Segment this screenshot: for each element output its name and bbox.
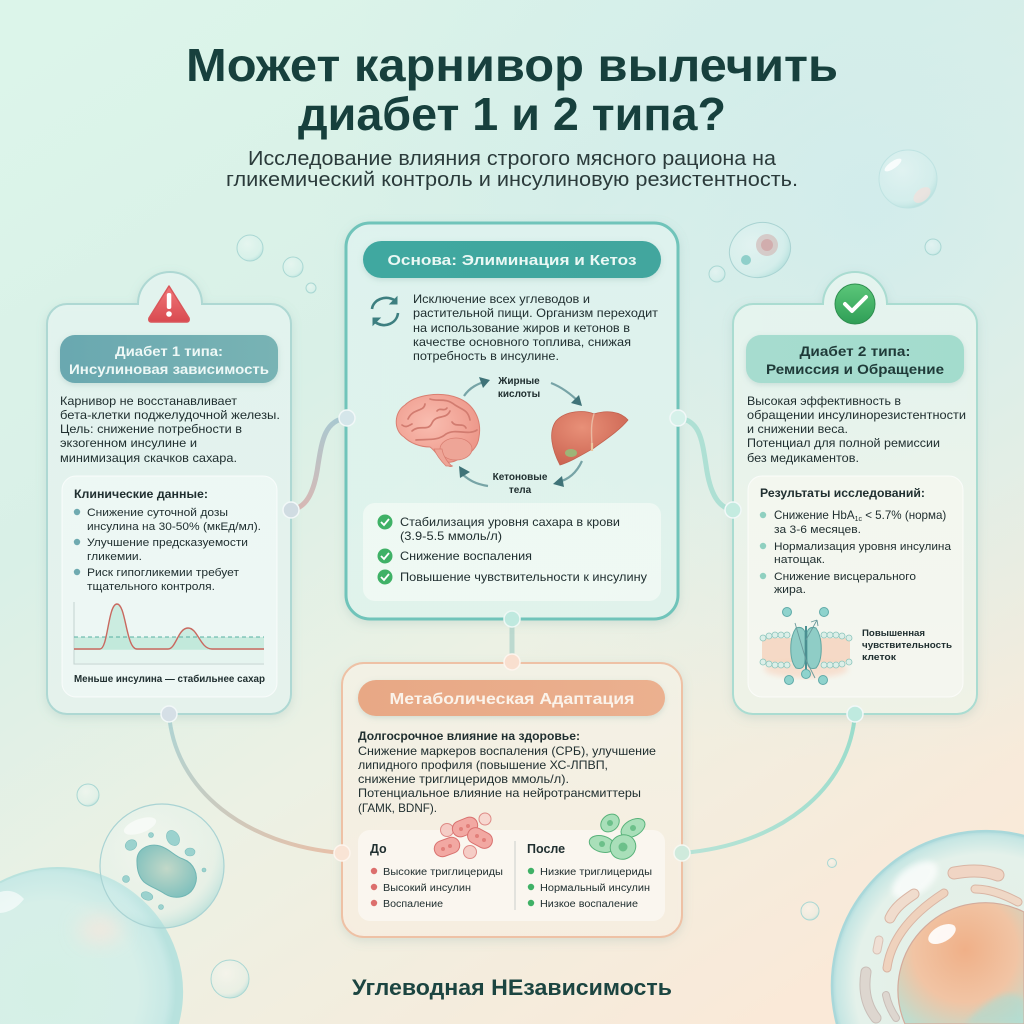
card: before and after xyxy=(358,810,665,921)
card: foundation benefits: (3.9-5.5 ммоль/л) xyxy=(400,530,502,543)
cell: large teal bottom left corner xyxy=(0,868,182,1024)
icon: brain xyxy=(396,394,480,466)
connector: left panel to bottom panel xyxy=(169,714,342,853)
text block: foundation intro: Исключение всех углеводов и xyxy=(413,293,590,306)
list: research bullets: Снижение HbA xyxy=(774,509,855,522)
text block: long-term effects: Долгосрочное влияние на здоровье: xyxy=(358,730,580,743)
heading pill: foundation xyxy=(363,241,661,278)
list: clinical bullets: тщательного контроля. xyxy=(87,581,215,593)
cell: top right small xyxy=(722,214,798,286)
subtitle xyxy=(226,148,798,191)
arrow: fatty acids to liver xyxy=(551,383,582,406)
panel: metabolic adaptation xyxy=(342,663,682,937)
icon: liver xyxy=(552,412,628,465)
arrow: ketones to brain xyxy=(459,466,488,486)
icon: green check xyxy=(835,284,875,324)
list: research bullets: < 5.7% (норма) xyxy=(862,509,946,522)
list: clinical bullets: Улучшение предсказуемости xyxy=(87,537,248,549)
title: диабет 1 и 2 типа? xyxy=(298,88,726,140)
list: research bullets: за 3-6 месяцев. xyxy=(774,524,861,536)
cell: large orange bottom right corner xyxy=(832,831,1024,1024)
list: clinical bullets: инсулина на 30-50% (мкЕд/мл). xyxy=(87,521,261,533)
connector nodes xyxy=(161,410,863,861)
list: clinical bullets: Риск гипогликемии требует xyxy=(87,567,239,579)
subtitle: гликемический контроль и инсулиновую резистентность. xyxy=(226,169,798,191)
arrow: liver to ketones xyxy=(553,461,582,487)
bubbles: scattered background xyxy=(77,150,941,998)
panel: foundation elimination and ketosis xyxy=(346,223,678,619)
list: before xyxy=(371,867,503,910)
list: research bullets: натощак. xyxy=(774,554,825,566)
label: membrane caption: клеток xyxy=(862,652,896,662)
text block: long-term effects: Потенциальное влияние на нейротрансмиттеры xyxy=(358,787,641,800)
text block: type 1 intro xyxy=(60,395,280,465)
text block: type 1 intro: Карнивор не восстанавливает xyxy=(60,395,238,408)
list: after: Нормальный инсулин xyxy=(540,883,650,894)
icon: cycle arrows xyxy=(372,297,398,325)
heading pill: foundation: Основа: Элиминация и Кетоз xyxy=(388,252,636,269)
text block: type 2 intro: без медикаментов. xyxy=(747,452,859,465)
list: after: Низкое воспаление xyxy=(540,899,638,910)
connector: centre to left panel xyxy=(291,418,347,510)
heading: after: После xyxy=(527,842,565,856)
heading pill: type 2 xyxy=(746,335,964,383)
icon: warning triangle xyxy=(149,286,189,322)
text block: type 1 intro: Цель: снижение потребности в xyxy=(60,423,242,436)
card: clinical data: Клинические данные: xyxy=(74,487,208,501)
card: foundation benefits xyxy=(363,503,661,601)
card: foundation benefits: Стабилизация уровня сахара в крови xyxy=(400,516,620,529)
label: membrane caption xyxy=(862,628,952,662)
cell: bottom left dividing xyxy=(100,804,224,928)
heading pill: type 1: Инсулиновая зависимость xyxy=(69,361,269,377)
list: research bullets xyxy=(760,509,952,596)
list: before: Высокие триглицериды xyxy=(383,867,503,878)
icon: check marks xyxy=(378,514,392,584)
label: fatty acids: кислоты xyxy=(498,389,540,400)
card: foundation benefits: Снижение воспаления xyxy=(400,550,532,563)
chart: insulin and sugar curve xyxy=(74,602,264,664)
chart caption: Меньше инсулина — стабильнее сахар xyxy=(74,673,265,685)
text block: type 1 intro: бета-клетки поджелудочной железы. xyxy=(60,409,280,422)
label: ketone bodies: тела xyxy=(509,485,532,496)
text block: long-term effects: Снижение маркеров воспаления (СРБ), улучшение xyxy=(358,745,656,758)
label: ketone bodies xyxy=(493,472,548,496)
footer brand: Углеводная НЕзависимость xyxy=(352,975,672,1000)
text block: type 1 intro: экзогенном инсулине и xyxy=(60,437,197,450)
text block: foundation intro: качестве основного топлива, снижая xyxy=(413,336,631,349)
heading pill: type 1 xyxy=(60,335,278,383)
label: fatty acids: Жирные xyxy=(497,376,540,387)
text block: foundation intro: на использование жиров и кетонов в xyxy=(413,322,630,335)
text block: long-term effects: липидного профиля (повышение ХС-ЛПВП, xyxy=(358,759,608,772)
text block: foundation intro: потребность в инсулине. xyxy=(413,350,559,363)
list: before: Воспаление xyxy=(383,899,443,910)
heading pill: metabolic: Метаболическая Адаптация xyxy=(390,691,634,708)
list: research bullets: Снижение висцерального xyxy=(774,571,916,583)
panel: diabetes type 1 xyxy=(47,272,291,714)
text block: foundation intro xyxy=(413,293,659,363)
list: research bullets: 1c xyxy=(855,516,862,523)
icon: healthy green cells xyxy=(587,810,648,864)
connector: centre to bottom panel xyxy=(510,620,514,662)
list: clinical bullets xyxy=(74,507,261,593)
panel: diabetes type 2 xyxy=(733,272,977,714)
list: clinical bullets: Снижение суточной дозы xyxy=(87,507,228,519)
arrow: brain to fatty acids xyxy=(464,377,490,396)
label: fatty acids xyxy=(497,376,540,400)
card: clinical data xyxy=(62,476,277,697)
label: membrane caption: чувствительность xyxy=(862,640,952,650)
connector: right panel to bottom panel xyxy=(682,714,855,853)
list: research bullets: жира. xyxy=(774,584,806,596)
card: research results: Результаты исследований: xyxy=(760,486,925,500)
text block: long-term effects xyxy=(358,730,656,815)
text block: type 2 intro xyxy=(747,395,966,465)
icon: inflamed red cells xyxy=(432,813,495,859)
icon: cell membrane receptor xyxy=(760,608,852,684)
label: ketone bodies: Кетоновые xyxy=(493,472,548,483)
title: Может карнивор вылечить xyxy=(186,39,838,91)
heading: before: До xyxy=(370,842,387,856)
text block: type 2 intro: и снижении веса. xyxy=(747,423,848,436)
heading pill: type 2: Ремиссия и Обращение xyxy=(766,361,944,377)
text block: type 2 intro: Высокая эффективность в xyxy=(747,395,901,408)
list: after xyxy=(528,867,652,910)
text block: foundation intro: растительной пищи. Организм переходит xyxy=(413,307,659,320)
subtitle: Исследование влияния строгого мясного рациона на xyxy=(248,148,777,170)
text block: type 1 intro: минимизация скачков сахара. xyxy=(60,452,237,465)
heading pill: type 1: Диабет 1 типа: xyxy=(115,343,223,359)
list: research bullets: Нормализация уровня инсулина xyxy=(774,541,952,553)
list: before: Высокий инсулин xyxy=(383,883,471,894)
label: membrane caption: Повышенная xyxy=(862,628,925,638)
text block: type 2 intro: Потенциал для полной ремиссии xyxy=(747,437,940,450)
card: foundation benefits: Повышение чувствительности к инсулину xyxy=(400,571,647,584)
heading pill: type 2: Диабет 2 типа: xyxy=(800,343,910,359)
list: clinical bullets: гликемии. xyxy=(87,551,142,563)
text block: long-term effects: (ГАМК, BDNF). xyxy=(358,802,437,815)
list: after: Низкие триглицериды xyxy=(540,867,652,878)
title xyxy=(186,39,838,140)
connector: centre to right panel xyxy=(678,418,733,510)
text block: long-term effects: снижение триглицеридов ммоль/л). xyxy=(358,773,569,786)
card: research results xyxy=(748,476,963,697)
heading pill: metabolic xyxy=(358,680,665,716)
text block: type 2 intro: обращении инсулинорезистентности xyxy=(747,409,966,422)
